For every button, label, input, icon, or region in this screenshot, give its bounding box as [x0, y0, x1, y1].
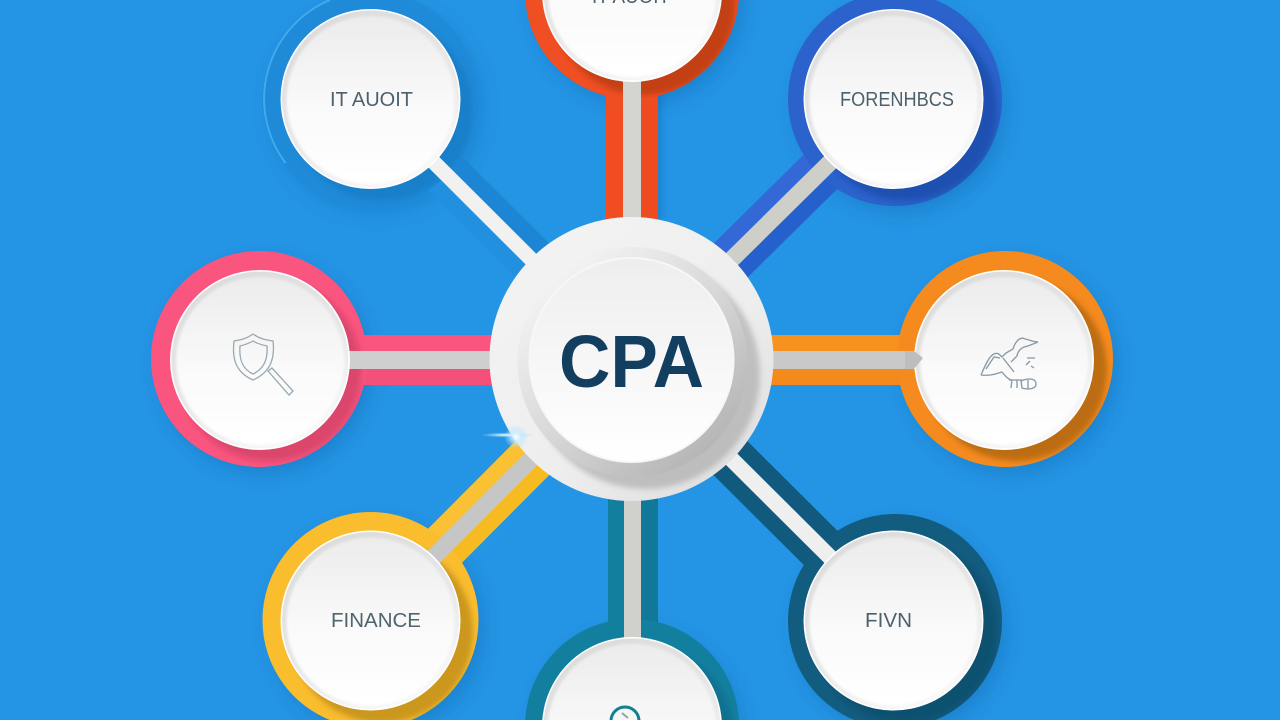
node: top — [525, 0, 745, 225]
sparkle — [480, 425, 536, 449]
label: FORENSICS: FORENHBCS — [840, 89, 954, 111]
title: CPA: CPA — [559, 320, 704, 403]
label: FIN: FIVN — [865, 610, 912, 632]
node: FINANCE — [262, 441, 550, 720]
node: FORENSICS — [714, 0, 1010, 278]
icon: shield with magnifier — [233, 334, 293, 395]
icon: map sketch — [981, 338, 1038, 389]
label: IT AUDIT: IT AUOIT — [330, 89, 413, 111]
node: bottom — [525, 490, 745, 720]
label: FINANCE: FINANCE — [331, 610, 421, 632]
node: shield search — [151, 251, 505, 475]
connector tip: right band — [905, 351, 923, 369]
node: IT AUDIT — [262, 0, 549, 264]
hub: CPA — [490, 217, 774, 501]
icon: bottom circle — [611, 707, 639, 720]
node: map — [755, 251, 1119, 475]
node: FIN — [714, 441, 1010, 720]
